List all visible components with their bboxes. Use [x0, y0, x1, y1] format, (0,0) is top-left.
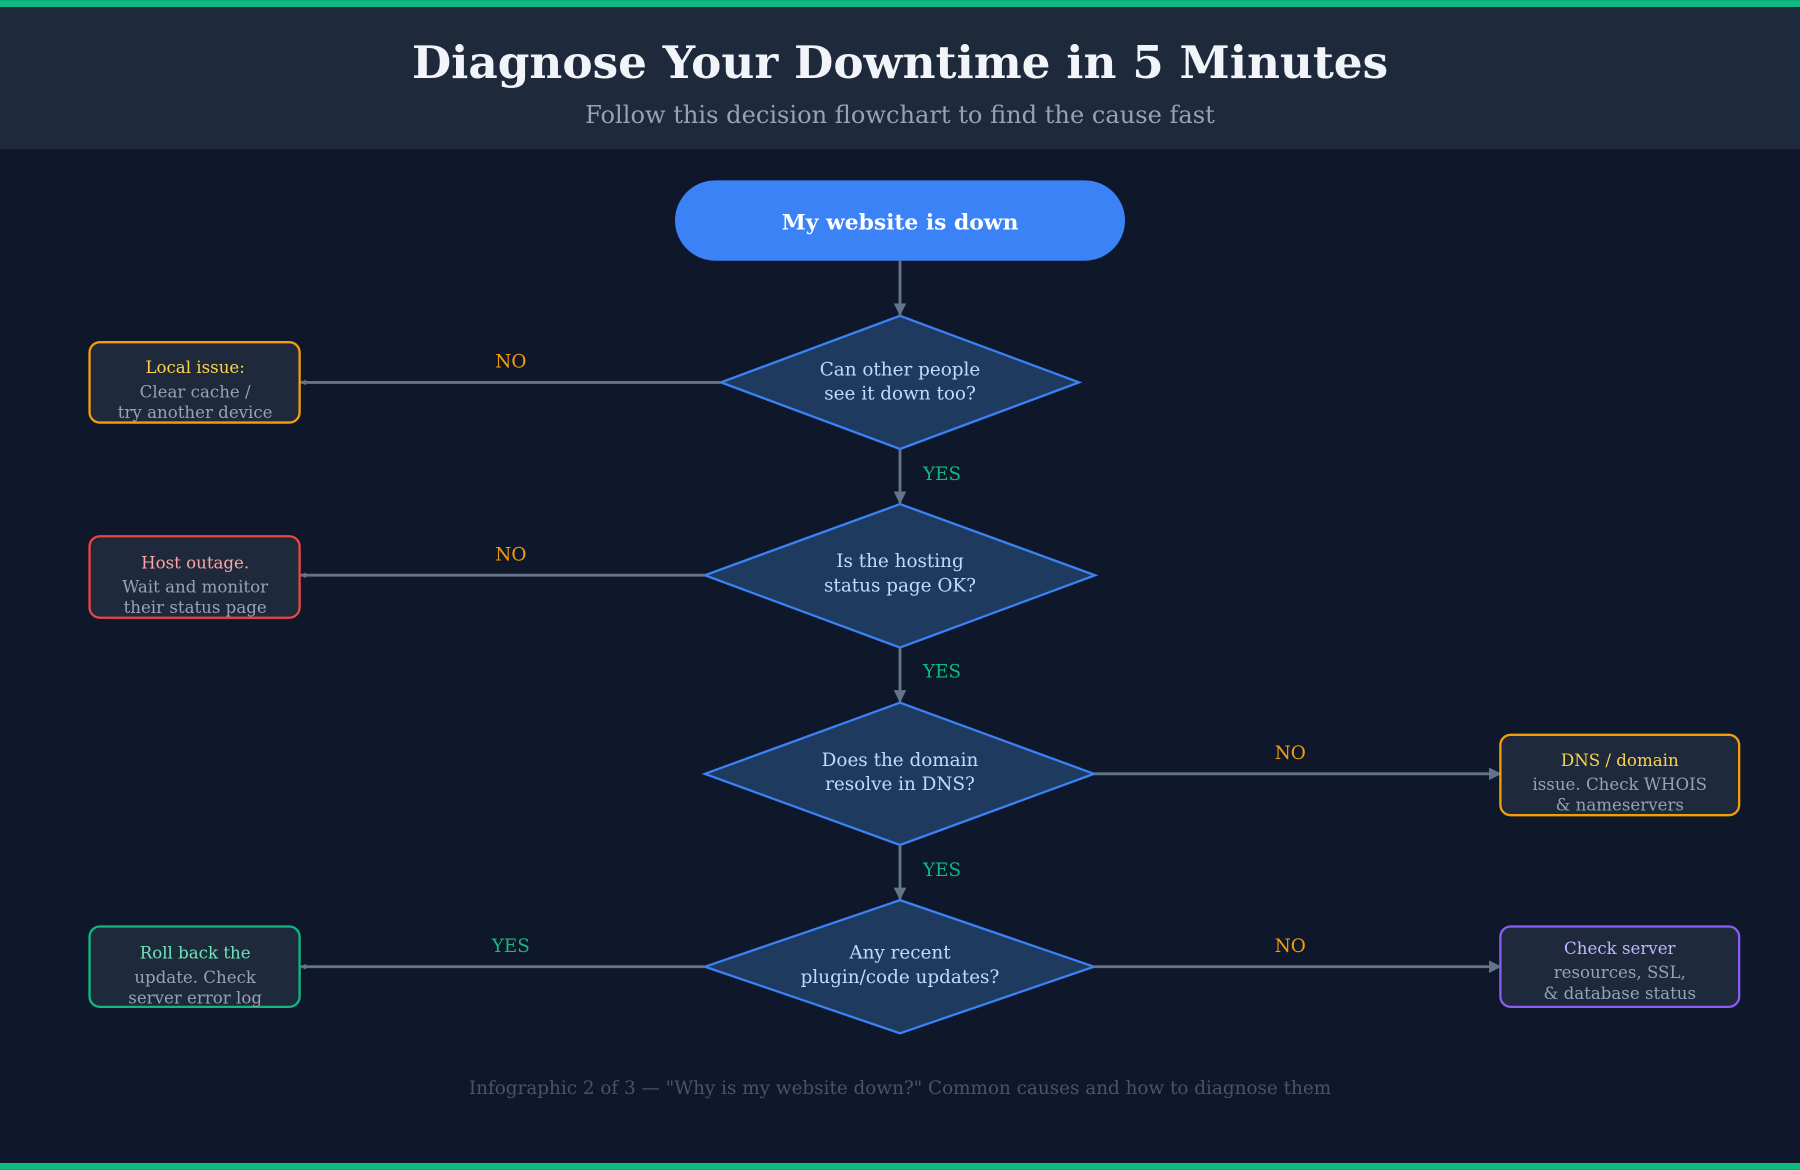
outcome: server: resources, SSL, [1554, 963, 1686, 982]
arrow: q1 NO: NO [495, 351, 526, 372]
arrow: start to q1 [899, 261, 901, 315]
outcome: DNS [1500, 735, 1739, 815]
arrow: q2 NO: NO [495, 544, 526, 565]
decision 3: Does the domain [822, 750, 979, 771]
arrow: q3 YES [900, 845, 961, 899]
arrow: q2 YES: YES [922, 661, 961, 682]
outcome: DNS: issue. Check WHOIS [1532, 775, 1707, 794]
outcome: roll back: server error log [128, 988, 262, 1007]
arrow: q2 YES [900, 648, 961, 702]
decision 3: resolve in DNS? [825, 774, 975, 795]
outcome: local issue: try another device [118, 403, 273, 422]
subtitle: Follow this decision flowchart to find the cause fast [585, 101, 1215, 129]
decision 1: Can other people [820, 359, 980, 380]
arrow: q1 YES [900, 449, 961, 503]
outcome: roll back [90, 927, 300, 1007]
arrow: q4 YES: YES [491, 936, 530, 957]
arrow: q1 YES: YES [922, 464, 961, 485]
outcome: roll back: Roll back the [140, 944, 251, 963]
outcome: roll back: update. Check [134, 968, 257, 987]
decision 3 [705, 703, 1094, 845]
decision 4: plugin/code updates? [801, 967, 999, 988]
outcome: local issue: Clear cache / [140, 382, 251, 401]
outcome: server [1500, 927, 1739, 1007]
arrow: q3 YES: YES [922, 860, 961, 881]
outcome: DNS: & nameservers [1556, 796, 1684, 815]
decision 2: Is the hosting [836, 551, 964, 572]
outcome: DNS: DNS / domain [1561, 751, 1679, 770]
decision 4 [705, 900, 1094, 1033]
outcome: host outage [90, 536, 300, 618]
outcome: server: Check server [1564, 939, 1676, 958]
outcome: host outage: their status page [124, 598, 267, 617]
decision 4: Any recent [848, 943, 951, 964]
footer note: Infographic 2 of 3 — "Why is my website down?" Common causes and how to diagnose them [469, 1078, 1331, 1099]
start node [675, 180, 1125, 261]
bottom bar [0, 1163, 1800, 1170]
outcome: server: & database status [1544, 984, 1696, 1003]
arrow: q3 NO: NO [1275, 743, 1306, 764]
outcome: local issue: Local issue: [145, 358, 245, 377]
outcome: host outage: Wait and monitor [122, 577, 268, 596]
start node: My website is down [782, 211, 1019, 236]
decision 1: see it down too? [824, 384, 976, 405]
outcome: host outage: Host outage. [141, 553, 249, 572]
arrow: q4 NO: NO [1275, 936, 1306, 957]
outcome: local issue [90, 342, 300, 423]
decision 2: status page OK? [824, 575, 976, 596]
decision 1 [721, 316, 1079, 449]
title: Diagnose Your Downtime in 5 Minutes [412, 35, 1388, 89]
decision 2 [705, 504, 1095, 648]
header band [0, 0, 1800, 149]
